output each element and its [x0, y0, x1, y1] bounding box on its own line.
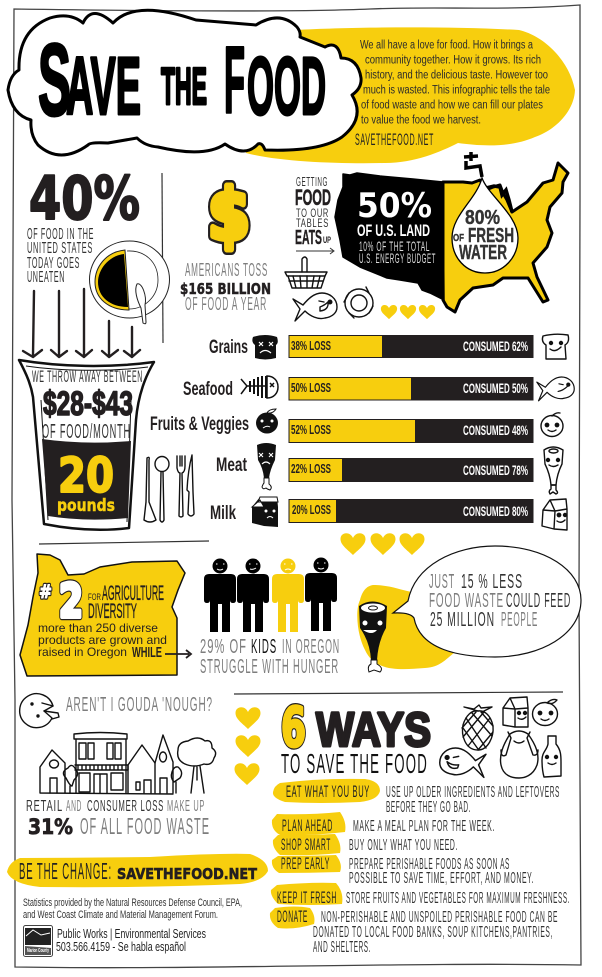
statistics credit: Statistics provided by the Natural Resources Defense Council, EPA, — [23, 897, 242, 909]
panel: intro blob: SAVETHEFOOD.NET — [355, 130, 434, 149]
food labels: Grains — [209, 337, 248, 358]
text: getting food to our tables eats up — [295, 174, 334, 254]
icon: happy toast — [542, 334, 569, 359]
stat: 50 percent: OF U.S. LAND — [357, 221, 430, 240]
water drop stat — [452, 178, 518, 273]
arrows into cup — [23, 289, 140, 357]
text: OF FOOD A YEAR — [185, 294, 267, 314]
way: donate: DONATE — [277, 907, 308, 926]
statistics credit — [23, 897, 242, 921]
retail loss stat: MAKE UP — [167, 798, 205, 815]
food labels: Seafood — [183, 379, 233, 400]
person — [204, 558, 236, 632]
banner: be the change: SAVETHEFOOD.NET — [117, 865, 258, 883]
title cloud — [8, 10, 361, 155]
panel: intro blob — [246, 27, 575, 163]
bubble — [393, 546, 581, 657]
knife — [136, 284, 146, 324]
icon: happy fish — [537, 377, 574, 401]
icon: sad drumstick — [257, 443, 276, 490]
water drop stat: WATER — [459, 242, 507, 264]
intro text: to value the food we harvest. — [361, 114, 481, 126]
intro text: of food waste and how we can fill our plates — [361, 100, 543, 112]
text: BUY ONLY WHAT YOU NEED. — [349, 837, 458, 854]
caption: TODAY GOES — [27, 255, 80, 272]
text: getting food to our tables eats up: TABLES — [296, 216, 329, 230]
icon: apple — [532, 699, 558, 726]
rank number: # — [39, 581, 52, 603]
arrow — [296, 248, 334, 254]
way: eat what you buy — [273, 779, 560, 816]
bar: milk: CONSUMED 80% — [463, 503, 528, 519]
way: donate: AND SHELTERS. — [313, 939, 371, 956]
icon: roast chicken — [500, 731, 538, 778]
person: yellow — [272, 558, 304, 632]
stat: 40 percent — [27, 164, 140, 286]
intro text: history, and the delicious taste. However too — [365, 70, 548, 82]
way: eat what you buy: BEFORE THEY GO BAD. — [386, 799, 471, 816]
text: getting food to our tables eats up: TO OUR — [296, 206, 329, 220]
stat: 40 percent: UNITED STATES — [27, 240, 93, 257]
icon: happy milk carton — [542, 499, 567, 530]
icon: smiling drumstick — [359, 602, 387, 672]
panel: Oregon map: AGRICULTURE — [102, 582, 164, 605]
bar: grains — [288, 335, 534, 358]
text: getting food to our tables eats up: UP — [323, 235, 331, 245]
map: United States — [335, 152, 568, 312]
way: plan ahead: PLAN AHEAD — [282, 816, 333, 835]
panel: Oregon map — [20, 554, 185, 676]
rank number: # — [39, 581, 52, 603]
icon: pie on plate — [90, 241, 170, 324]
title: THE — [161, 58, 207, 116]
retail loss stat: AND — [66, 798, 82, 815]
retail loss stat: 31% — [28, 815, 73, 839]
map: United States: U.S. ENERGY BUDGET — [359, 250, 436, 266]
dollars tossed text: $165 BILLION — [180, 280, 271, 298]
contact text: 503.566.4159 - Se habla español — [56, 939, 186, 954]
icon: happy drumstick — [544, 447, 563, 494]
title: F — [224, 27, 245, 132]
caption: kids: KIDS — [251, 636, 277, 658]
icon: cheese — [20, 694, 59, 728]
text: STRUGGLE WITH HUNGER — [200, 656, 339, 678]
icon: sad milk carton — [252, 497, 278, 527]
icon: fish bones — [241, 376, 278, 398]
way: keep it fresh — [271, 883, 570, 907]
food labels: Milk — [210, 503, 236, 524]
icon: fish — [293, 293, 337, 321]
retail loss stat: RETAIL — [26, 798, 63, 815]
text: IN OREGON — [282, 636, 340, 658]
logo: Marion County — [24, 926, 52, 956]
caption: UNEATEN — [27, 269, 65, 286]
intro text: community together. How it grows. Its rich — [365, 54, 541, 66]
bar: meat: 22% LOSS — [291, 461, 331, 476]
rank number: 2 — [59, 574, 83, 628]
bar: fruits and veggies: 52% LOSS — [291, 422, 331, 437]
statistics credit: and West Coast Climate and Material Management Forum. — [23, 909, 218, 921]
cup text: $28-$43 — [43, 385, 133, 423]
contact text: Public Works | Environmental Services — [57, 926, 206, 941]
icon: happy apple — [541, 413, 563, 436]
map east half (water) — [443, 163, 568, 312]
icon: bottle — [542, 736, 561, 777]
cup dark panel — [42, 439, 131, 520]
map west half (land) — [335, 173, 444, 300]
way: shop smart: SHOP SMART — [281, 835, 331, 854]
way: prep early — [272, 854, 534, 887]
title — [38, 23, 326, 137]
icon: dollar sign: $ — [208, 174, 250, 256]
heading: 6 ways: 6 — [281, 696, 306, 759]
retail loss stat: CONSUMER LOSS — [87, 798, 164, 815]
water drop stat: FRESH — [468, 225, 514, 247]
bar: milk: 20% LOSS — [292, 502, 331, 517]
banner: be the change — [7, 854, 268, 887]
person — [305, 558, 337, 631]
hearts row — [381, 305, 435, 319]
Oregon text: raised in Oregon — [38, 645, 127, 659]
bar: seafood — [288, 377, 534, 400]
way: prep early: PREP EARLY — [281, 854, 330, 873]
icon: recycle — [344, 287, 373, 318]
stat: 40 percent: OF FOOD IN THE — [27, 226, 94, 243]
way: keep it fresh: KEEP IT FRESH — [277, 888, 337, 907]
agriculture diversity heading: DIVERSITY — [88, 600, 137, 623]
food labels: Meat — [216, 455, 247, 476]
caption: kids — [200, 636, 340, 678]
20 pounds: pounds — [57, 496, 115, 516]
water drop stat: OF — [453, 233, 464, 244]
hearts above bubble — [340, 533, 424, 555]
bubble text: 25 MILLION — [430, 609, 495, 631]
cup text — [32, 367, 143, 443]
text: getting food to our tables eats up: EATS — [295, 227, 322, 249]
icon: dollar sign: $ — [208, 174, 250, 256]
text: getting food to our tables eats up: GETTING — [296, 174, 328, 189]
water drop stat: 80% — [465, 207, 500, 229]
Oregon text: WHILE — [132, 644, 162, 661]
bar: meat: CONSUMED 78% — [463, 462, 528, 478]
cup: food thrown away — [19, 360, 154, 530]
icon: pineapple — [462, 705, 493, 750]
bar: meat — [288, 458, 534, 482]
icon: basket — [285, 257, 327, 288]
stat: 50 percent: 50% — [357, 186, 432, 226]
bar: grains: CONSUMED 62% — [463, 338, 528, 354]
great lakes — [478, 186, 512, 212]
way: shop smart — [273, 834, 458, 855]
stat: 50 percent: 10% OF THE TOTAL — [359, 238, 430, 254]
rank number: 2 — [59, 574, 83, 628]
illustration: houses and trees — [40, 732, 216, 794]
icon: milk carton — [503, 697, 528, 727]
intro text — [360, 40, 550, 126]
bubble text — [429, 571, 571, 631]
stat: 50 percent — [357, 186, 436, 266]
intro text: We all have a love for food. How it brings a — [360, 40, 533, 52]
heading: 6 ways: WAYS — [316, 704, 431, 757]
text: getting food to our tables eats up: FOOD — [295, 185, 331, 210]
20 pounds: 20 — [58, 448, 114, 504]
bar: milk — [288, 499, 534, 523]
intro text: much is wasted. This infographic tells the tale — [363, 84, 550, 96]
icon: sad toast — [252, 335, 278, 360]
icon: fish — [440, 748, 486, 777]
icon: faucet — [464, 152, 482, 177]
icon: dollar sign — [180, 174, 271, 314]
title: AVE — [66, 41, 141, 132]
banner: be the change: BE THE CHANGE: — [19, 858, 112, 884]
arrow: while — [165, 650, 191, 658]
food labels: Fruits & Veggies — [150, 414, 249, 435]
title cloud: OOD — [247, 41, 326, 132]
caption: kids: 29% OF — [200, 636, 247, 658]
cup text: OF FOOD/MONTH — [42, 421, 131, 443]
icon: sad apple — [256, 409, 278, 434]
logo: Marion County: Marion County — [27, 948, 49, 954]
bar: fruits and veggies: CONSUMED 48% — [463, 422, 528, 438]
agriculture diversity heading — [88, 582, 164, 623]
stat: 40 percent: 40% — [29, 164, 140, 234]
food labels — [150, 337, 249, 524]
icon: cutlery — [144, 455, 194, 522]
text: AMERICANS TOSS — [185, 260, 268, 280]
Oregon text: more than 250 diverse — [38, 621, 158, 635]
caption — [27, 226, 94, 286]
people: kids in Oregon — [204, 558, 337, 632]
text: AREN'T I GOUDA 'NOUGH? — [66, 694, 213, 716]
heading: 6 ways — [281, 696, 431, 779]
text: TO SAVE THE FOOD — [281, 748, 428, 779]
title: S — [38, 23, 71, 137]
rank number — [39, 574, 83, 628]
heading: 6 ways: 6 — [281, 696, 306, 759]
bar: seafood: CONSUMED 50% — [463, 380, 528, 396]
Oregon text: products are grown and — [38, 633, 167, 647]
bubble text: JUST — [429, 571, 455, 593]
way: plan ahead — [272, 812, 495, 835]
bubble text: PEOPLE — [501, 609, 538, 631]
panel: speech bubble — [357, 546, 581, 672]
bubble text: FOOD WASTE — [429, 590, 504, 612]
retail loss stat — [26, 798, 210, 839]
bar: fruits and veggies — [288, 419, 534, 443]
person — [237, 558, 269, 632]
way: donate — [270, 906, 558, 956]
Oregon text — [38, 621, 167, 661]
hearts: six ways — [234, 707, 260, 785]
bar: seafood: 50% LOSS — [291, 380, 331, 395]
way: eat what you buy: EAT WHAT YOU BUY — [286, 782, 370, 801]
agriculture diversity heading: FOR — [88, 592, 101, 602]
dollars tossed text — [180, 260, 271, 314]
bar: grains: 38% LOSS — [291, 338, 331, 353]
bubble text: 15 % LESS — [461, 571, 523, 593]
text: WE THROW AWAY BETWEEN — [32, 367, 143, 386]
contact text — [56, 926, 206, 954]
bar chart: loss vs consumed — [288, 335, 534, 523]
text: OF ALL FOOD WASTE — [80, 813, 210, 839]
